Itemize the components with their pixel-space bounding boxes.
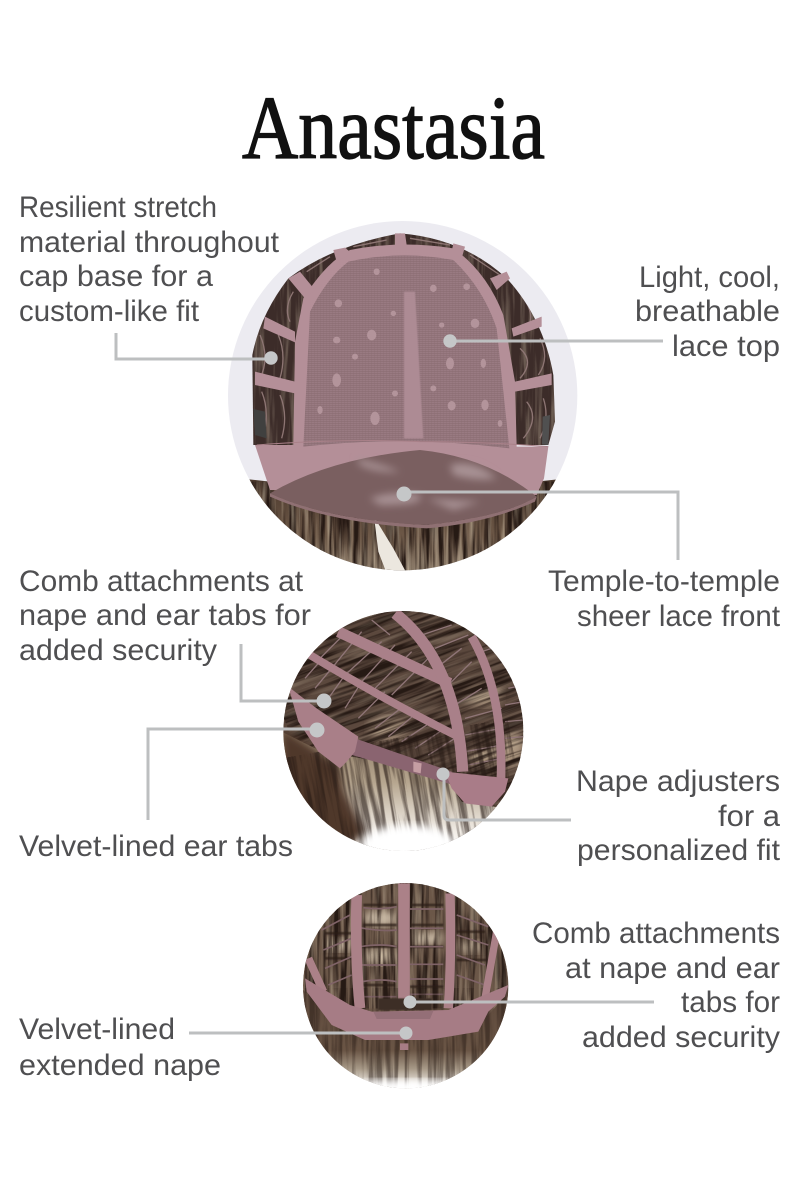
nape tab bbox=[445, 772, 508, 807]
callout: stretch material bbox=[19, 191, 280, 365]
callout: comb attachments right: Comb attachments bbox=[532, 917, 780, 950]
title: Anastasia bbox=[242, 79, 545, 178]
callout: comb attachments right: at nape and ear bbox=[565, 952, 780, 985]
lower hair bbox=[302, 988, 512, 1092]
callout: comb attachments at nape and ear tabs: added security bbox=[19, 634, 217, 667]
dark gaps bbox=[325, 905, 487, 987]
hair highlights bbox=[363, 910, 397, 927]
callout: comb attachments right bbox=[404, 917, 780, 1054]
callout: velvet-lined extended nape: extended nape bbox=[19, 1049, 221, 1082]
photo: back view of wig cap bbox=[303, 883, 508, 1088]
lace dots bbox=[317, 268, 502, 427]
bottom band bbox=[352, 740, 452, 784]
lace top mesh bbox=[303, 255, 509, 448]
callout: comb attachments at nape and ear tabs: Comb attachments at bbox=[19, 565, 304, 598]
cap base bands bbox=[255, 233, 552, 495]
callout: lace top: breathable bbox=[635, 295, 780, 328]
hair base bbox=[303, 883, 508, 1088]
dark hair panels bbox=[252, 233, 555, 445]
cap bands bbox=[308, 883, 497, 1008]
callout: comb attachments right: added security bbox=[582, 1021, 780, 1054]
callout: stretch material: material throughout bbox=[19, 226, 280, 259]
callout: stretch material: custom-like fit bbox=[19, 295, 200, 328]
nape band bbox=[305, 978, 508, 1040]
combs bbox=[253, 409, 267, 438]
cross threads bbox=[305, 620, 523, 765]
callout: comb attachments right: tabs for bbox=[681, 986, 780, 1019]
callout: nape adjusters: personalized fit bbox=[577, 834, 781, 867]
cap bands bbox=[310, 613, 501, 778]
callout: comb attachments at nape and ear tabs bbox=[19, 565, 332, 708]
callout: nape adjusters: Nape adjusters bbox=[576, 765, 780, 798]
centre part bbox=[404, 292, 423, 438]
callout: nape adjusters bbox=[436, 765, 781, 867]
callout: velvet-lined extended nape bbox=[19, 1013, 412, 1082]
callout: velvet-lined extended nape: Velvet-lined bbox=[19, 1013, 175, 1046]
photo: side view of wig cap bbox=[283, 611, 524, 851]
lace front bbox=[270, 450, 537, 528]
hair highlights bbox=[250, 232, 557, 448]
callout: lace front bbox=[396, 486, 781, 633]
band seam bbox=[257, 441, 548, 447]
callout: stretch material: cap base for a bbox=[19, 260, 213, 293]
hair highlights bbox=[462, 683, 502, 707]
callout: lace front: Temple-to-temple bbox=[548, 565, 780, 598]
callout: comb attachments at nape and ear tabs: nape and ear tabs for bbox=[19, 599, 311, 632]
hair base bbox=[283, 611, 523, 851]
cross threads bbox=[322, 907, 488, 997]
callout: lace front: sheer lace front bbox=[577, 600, 781, 633]
callout: stretch material: Resilient stretch bbox=[19, 191, 217, 224]
callout: nape adjusters: for a bbox=[718, 800, 780, 833]
callout: lace top: lace top bbox=[672, 330, 780, 363]
callout: velvet-lined ear tabs: Velvet-lined ear tabs bbox=[19, 830, 293, 863]
callout: lace top: Light, cool, bbox=[639, 261, 780, 294]
callout: velvet-lined ear tabs bbox=[19, 722, 324, 863]
callout: lace top bbox=[443, 261, 780, 363]
background disc bbox=[228, 221, 577, 570]
lower hair bbox=[283, 732, 496, 851]
photo: top view of wig cap bbox=[228, 221, 577, 575]
ear tab bbox=[288, 687, 358, 768]
